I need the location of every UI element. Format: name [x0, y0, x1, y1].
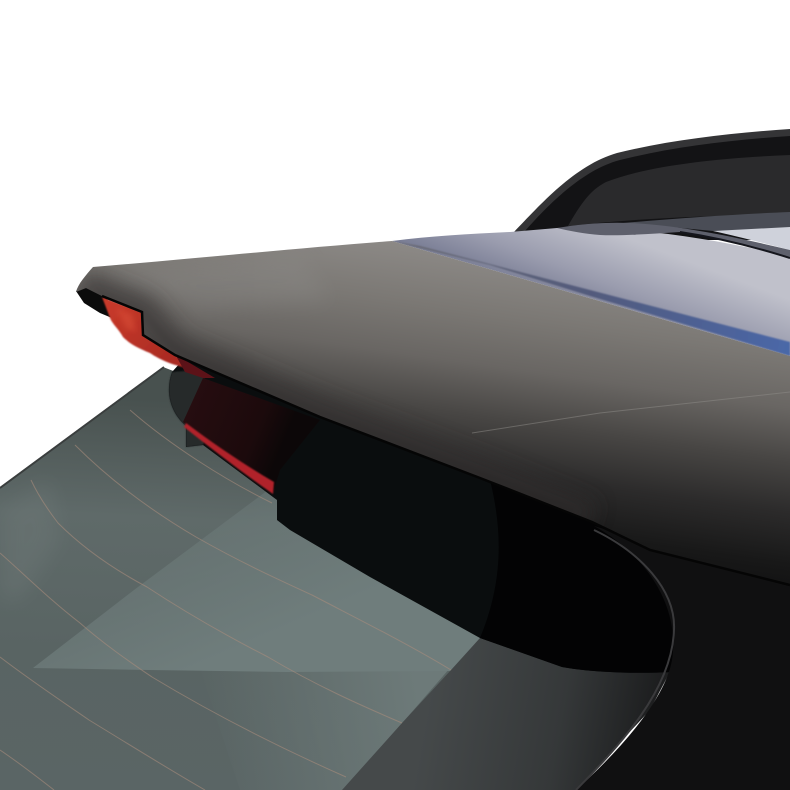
- high mounted light housing: [183, 378, 320, 494]
- roof ridge: [557, 223, 790, 258]
- roof light glass reflection: [713, 227, 790, 250]
- side window frame: [514, 129, 790, 240]
- glass top edge: [0, 367, 164, 488]
- red brake light: [102, 297, 215, 378]
- heating lines on the glass: [0, 410, 451, 790]
- lighter reflection on glass: [33, 490, 480, 672]
- rear window glass: [0, 367, 660, 790]
- spoiler underside shadow line: [102, 296, 790, 585]
- dark shade under spoiler: [169, 352, 678, 673]
- glass lower right wash: [200, 668, 450, 790]
- dark lower glass band: [342, 638, 672, 790]
- spoiler dark tip: [76, 285, 112, 318]
- roof panel: [392, 212, 790, 356]
- lower red light strip: [184, 423, 274, 494]
- small dark red reflector: [175, 354, 215, 378]
- glass light wash near the edge: [0, 480, 60, 600]
- car body: [576, 526, 790, 790]
- spoiler lip shading: [80, 285, 592, 518]
- roof seam blue line: [392, 241, 790, 356]
- spoiler crease highlight: [472, 392, 790, 433]
- roof ridge dark underside: [680, 232, 790, 258]
- shade left soft edge: [169, 370, 215, 447]
- shade deep right area: [480, 480, 678, 673]
- spoiler left highlight: [183, 285, 226, 296]
- body shut line: [576, 530, 674, 790]
- roof raised strip: [623, 212, 790, 231]
- light sparkle: [116, 308, 136, 332]
- spoiler surface: [76, 241, 790, 585]
